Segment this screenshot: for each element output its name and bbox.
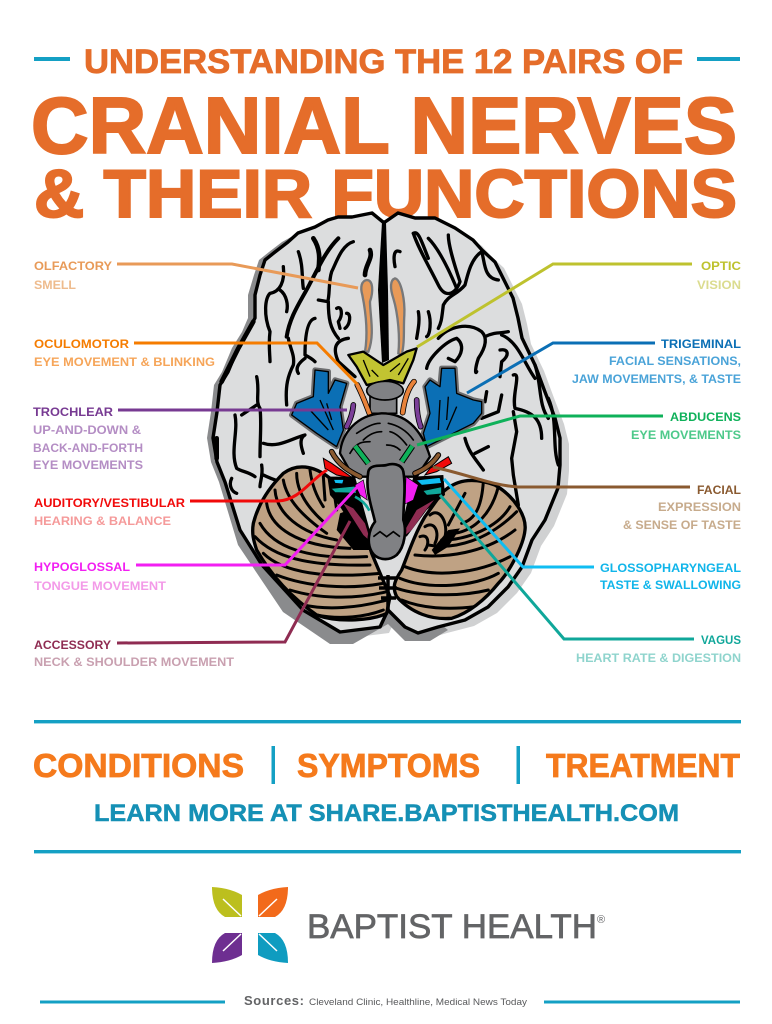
label: auditory vestibular: HEARING & BALANCE (34, 514, 171, 528)
logo: Baptist Health (212, 887, 605, 963)
nerve: auditory vestibular (323, 457, 452, 478)
logo wordmark: BAPTIST HEALTH (307, 908, 597, 946)
label: facial: & SENSE OF TASTE (623, 518, 741, 532)
label: accessory (34, 521, 350, 669)
label: vagus: HEART RATE & DIGESTION (576, 651, 741, 665)
nerve: accessory (343, 500, 434, 542)
heading: treatment: TREATMENT (546, 747, 740, 784)
label: trigeminal: TRIGEMINAL (661, 337, 741, 351)
label: auditory vestibular (34, 470, 327, 528)
label: facial: FACIAL (697, 483, 741, 497)
label: abducens: EYE MOVEMENTS (631, 428, 741, 442)
label: olfactory: OLFACTORY (34, 259, 112, 273)
label: oculomotor: OCULOMOTOR (34, 337, 129, 351)
vermis (378, 575, 398, 612)
sources: Sources: (244, 993, 304, 1008)
label: trigeminal (467, 337, 741, 393)
right folia stripes (397, 482, 517, 608)
cerebellum right lobe (394, 480, 525, 619)
sources: Cleveland Clinic, Healthline, Medical News Today (309, 997, 527, 1008)
nerve: abducens (355, 446, 412, 463)
central fissure (378, 222, 389, 363)
label: optic (417, 259, 741, 347)
medulla (367, 464, 405, 559)
panel: call to action (33, 720, 741, 853)
diencephalon (370, 397, 397, 413)
label: auditory vestibular: AUDITORY/VESTIBULAR (34, 496, 185, 510)
brain illustration (207, 213, 569, 644)
heading: conditions: CONDITIONS (33, 747, 244, 784)
title: and their functions: & THEIR FUNCTIONS (34, 156, 737, 232)
label: hypoglossal: TONGUE MOVEMENT (34, 579, 167, 593)
midbrain nerves and pons (292, 348, 482, 478)
nerve: oculomotor (357, 382, 414, 413)
nerve: olfactory right (391, 278, 404, 355)
light halo on the right (222, 219, 569, 639)
label: oculomotor: EYE MOVEMENT & BLINKING (34, 355, 215, 369)
label: facial: EXPRESSION (658, 500, 741, 514)
nerve: trigeminal (292, 368, 482, 447)
label: trochlear: UP-AND-DOWN & (33, 423, 141, 437)
label: optic: VISION (697, 278, 741, 292)
nerve: hypoglossal (355, 477, 418, 504)
brainstem nerves (327, 464, 445, 559)
label: trochlear: EYE MOVEMENTS (33, 458, 143, 472)
label: olfactory (34, 259, 358, 292)
label: trigeminal: JAW MOVEMENTS, & TASTE (572, 372, 741, 386)
heading: symptoms: SYMPTOMS (297, 747, 480, 784)
label: glossopharyngeal: GLOSSOPHARYNGEAL (600, 561, 741, 575)
nerve: olfactory left (361, 280, 372, 352)
cerebrum body (213, 213, 560, 633)
nerve: vagus (331, 486, 442, 495)
title: overline: UNDERSTANDING THE 12 PAIRS OF (84, 43, 683, 81)
right sulci (394, 233, 558, 505)
label: oculomotor (34, 337, 357, 384)
label: facial (433, 467, 741, 532)
label: vagus (440, 495, 741, 665)
pons (340, 413, 430, 477)
label: hypoglossal: HYPOGLOSSAL (34, 560, 130, 574)
label: accessory: NECK & SHOULDER MOVEMENT (34, 655, 235, 669)
label: abducens: ABDUCENS (670, 410, 741, 424)
label: olfactory: SMELL (34, 278, 76, 292)
left sulci (217, 238, 371, 493)
dark shadow on the left (207, 232, 448, 644)
label: vagus: VAGUS (701, 633, 741, 647)
link text: LEARN MORE AT SHARE.BAPTISTHEALTH.COM (94, 800, 679, 827)
label: trigeminal: FACIAL SENSATIONS, (609, 354, 741, 368)
nerve: facial (332, 452, 438, 477)
label: trochlear: TROCHLEAR (33, 405, 113, 419)
dark root area (327, 475, 445, 547)
label: trochlear (33, 405, 347, 472)
label: glossopharyngeal (444, 479, 741, 592)
label: optic: OPTIC (701, 259, 741, 273)
label: glossopharyngeal: TASTE & SWALLOWING (600, 578, 741, 592)
title: cranial nerves: CRANIAL NERVES (31, 81, 737, 170)
cerebellum left lobe (253, 467, 390, 620)
logo: Baptist Health: ® (597, 914, 605, 926)
label: hypoglossal (34, 486, 358, 593)
label: accessory: ACCESSORY (34, 638, 111, 652)
sources (40, 993, 740, 1008)
label: trochlear: BACK-AND-FORTH (33, 441, 143, 455)
nerve: glossopharyngeal (333, 477, 442, 485)
left folia stripes (255, 470, 387, 617)
nerve: optic chiasm (348, 348, 417, 385)
label: abducens (417, 410, 741, 445)
nerve: trochlear (347, 400, 421, 427)
logo icon (212, 887, 288, 963)
